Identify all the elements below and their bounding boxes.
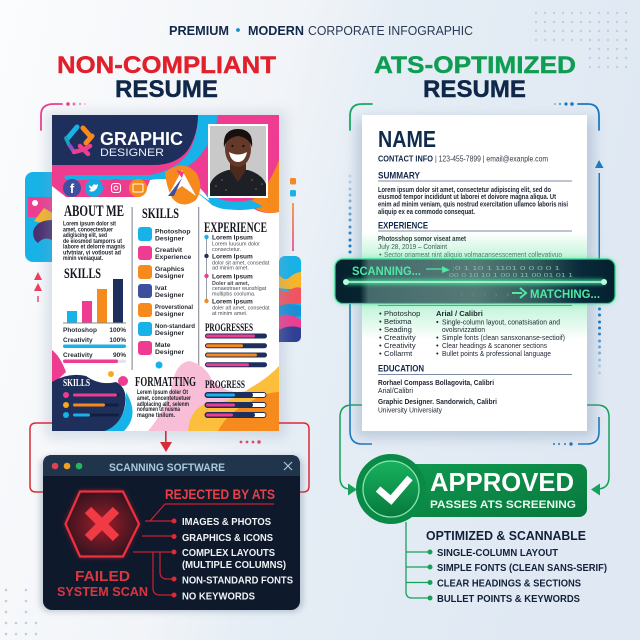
chart: skills bar chart: 100% bbox=[109, 327, 126, 334]
section: education: Rorhael Compass Bollagovita, Calibri bbox=[378, 378, 494, 387]
arrow: ats resume to approved, left bbox=[340, 405, 362, 496]
column: experience timeline: cenaestraer wuoshlgat bbox=[212, 286, 267, 292]
window title: SCANNING SOFTWARE bbox=[109, 462, 225, 474]
column: experience timeline: dolor sit amet, consedat bbox=[212, 260, 270, 266]
section: summary: eiusmod tempor incididunt ut laborei et doivore magna aliqua. Ut bbox=[378, 192, 556, 201]
column: skills list: Graphics bbox=[155, 266, 185, 273]
column: skills list: Non-standard bbox=[155, 323, 195, 330]
section: experience bbox=[378, 220, 572, 259]
approved label: APPROVED bbox=[430, 467, 574, 497]
name and contact: CONTACT INFO bbox=[378, 154, 434, 164]
logo: graphic designer bbox=[66, 127, 92, 154]
section: skills: Creativity bbox=[384, 341, 416, 350]
chart: skills bar chart: 90% bbox=[113, 352, 126, 359]
section: skills: Betixma bbox=[384, 317, 412, 326]
optimized and scannable checklist: SINGLE-COLUMN LAYOUT bbox=[437, 548, 559, 559]
top tagline: CORPORATE INFOGRAPHIC bbox=[308, 23, 473, 38]
progress panel bbox=[205, 379, 266, 418]
column: experience timeline: Lorem Ipsum bbox=[212, 234, 253, 242]
failed system scan label bbox=[57, 568, 148, 599]
section: education bbox=[378, 362, 572, 414]
glowing scan line bbox=[343, 279, 607, 285]
section: education: Arial/Calibri bbox=[378, 386, 413, 395]
rejection list: NON-STANDARD FONTS bbox=[182, 576, 293, 586]
column: experience timeline: Lorem Iuusum dolor bbox=[212, 242, 260, 248]
section: experience: • bbox=[379, 250, 382, 259]
chart: skills bar chart: Creativity bbox=[63, 337, 93, 344]
column: skills list: Designer bbox=[155, 273, 184, 280]
rejection connector lines bbox=[133, 504, 274, 595]
heading: non-compliant resume: NON-COMPLIANT bbox=[57, 52, 276, 79]
column: experience timeline: ad minim amet. bbox=[212, 266, 249, 272]
bottom colour blobs bbox=[52, 350, 279, 431]
mini skills panel: SKILLS bbox=[63, 377, 90, 389]
optimized and scannable checklist: SIMPLE FONTS (CLEAN SANS-SERIF) bbox=[437, 563, 607, 574]
section: experience: Photosshop somor viseat amet bbox=[378, 234, 466, 243]
column: experience timeline: consectetur. bbox=[212, 247, 241, 253]
section: education: Graphic Designer. Sandorwich, Calibri bbox=[378, 397, 497, 406]
column: experience timeline: multipbs cooluma. bbox=[212, 292, 255, 298]
section: skills: Simple fonts (clean sansxonanse-sectioif) bbox=[442, 333, 565, 342]
passes ats screening label: PASSES ATS SCREENING bbox=[430, 499, 576, 511]
column: about me: adiglscing elit, sed bbox=[63, 233, 107, 239]
scanning arrow and binary data bbox=[426, 266, 573, 279]
section: skills: • bbox=[436, 318, 439, 326]
section: skills: SKILLS bbox=[378, 294, 406, 305]
section: skills: • bbox=[436, 333, 439, 342]
column: about me: ABOUT ME bbox=[64, 203, 124, 220]
column: skills list: Designer bbox=[155, 292, 184, 299]
section: skills bbox=[378, 294, 572, 358]
section: experience: Sector oriameat nint aliquio volmacansesscement collevativuo bbox=[384, 250, 562, 259]
column: experience timeline: EXPERIENCE bbox=[204, 220, 267, 236]
column: skills list: Proverstional bbox=[155, 304, 193, 311]
column: experience timeline: at minim amet. bbox=[212, 311, 247, 317]
chart: skills bar chart: 100% bbox=[109, 337, 126, 344]
scanning arrow and binary data: 00 0 10 10 1 00 0 11 00 01 01 1 bbox=[449, 273, 573, 279]
column: about me: ufvtniar, vi votloust ad bbox=[63, 250, 121, 256]
section: summary: SUMMARY bbox=[378, 170, 421, 180]
chart: skills bar chart: Creativity bbox=[63, 352, 93, 359]
section: skills: • bbox=[436, 349, 439, 358]
column: about me: labore et delorre magnis bbox=[63, 244, 126, 250]
column: experience timeline: Lorem Ipsum bbox=[212, 274, 253, 280]
name and contact: | 123-455-7899 | email@exanple.com bbox=[435, 154, 548, 164]
heading: ats-optimized resume bbox=[374, 52, 576, 103]
arrow: left resume to scanner, centre bbox=[160, 431, 172, 452]
arrow: ats resume to approved, right bbox=[587, 405, 609, 496]
section: skills: • bbox=[379, 317, 382, 326]
chart: skills bar chart: Photoshop bbox=[63, 327, 97, 334]
checklist connector bbox=[406, 522, 432, 600]
rejection list: NO KEYWORDS bbox=[182, 592, 255, 602]
column: experience timeline: doler alt amet, consedat bbox=[212, 306, 270, 312]
chart: skills bar chart bbox=[63, 266, 126, 363]
section: summary bbox=[378, 170, 572, 216]
rejection list bbox=[172, 517, 293, 602]
column: skills list: SKILLS bbox=[142, 206, 179, 222]
panel: non-compliant graphic resume bbox=[46, 112, 286, 438]
top tagline bbox=[169, 23, 473, 38]
decorative side elements: left resume bbox=[25, 0, 301, 342]
progress bars panel bbox=[205, 322, 267, 367]
rejection list: IMAGES & PHOTOS bbox=[182, 517, 271, 528]
optimized and scannable checklist bbox=[406, 522, 607, 605]
social icons bbox=[63, 179, 147, 197]
section: summary: Lorem ipsum dolor sit amet, consectetur adipiscing elit, sed do bbox=[378, 185, 551, 194]
mini skills panel bbox=[63, 377, 119, 418]
section: skills: • bbox=[436, 341, 439, 350]
section: education: University Universiaty bbox=[378, 406, 442, 414]
section: skills: Photoshop bbox=[384, 309, 420, 318]
approved badge bbox=[356, 454, 587, 524]
matching label and arrow: MATCHING... bbox=[530, 287, 600, 301]
name and contact bbox=[378, 126, 548, 164]
column: experience timeline: Lorem Ipsum bbox=[212, 254, 253, 260]
section: education: EDUCATION bbox=[378, 362, 424, 374]
section: skills: • bbox=[379, 341, 382, 350]
column: experience timeline bbox=[204, 220, 270, 317]
heading: ats-optimized resume: ATS-OPTIMIZED bbox=[374, 52, 576, 79]
decorative side elements: right resume bbox=[348, 102, 604, 446]
section: experience: July 28, 2019 – Conlaint bbox=[378, 242, 448, 251]
formatting text block: amet, concentetuetuer bbox=[137, 396, 192, 402]
social icons: f bbox=[70, 181, 75, 196]
arrow: left resume to scanner, left bbox=[30, 423, 70, 498]
column: about me: minin veniaquat. bbox=[63, 256, 103, 262]
section: skills: Seading bbox=[384, 325, 412, 334]
progress bars panel: PROGRESSES bbox=[205, 322, 253, 334]
scanning arrow and binary data: ;0 1 10 1 1101 0 0 0 0 1 bbox=[452, 266, 560, 272]
section: skills: Creativity bbox=[384, 333, 416, 342]
scanning label: SCANNING... bbox=[352, 264, 421, 278]
formatting text block: adlplacing alit, selenm bbox=[137, 402, 189, 408]
icon: failed hexagon bbox=[65, 491, 139, 557]
column: skills list: Photoshop bbox=[155, 228, 190, 236]
resume header with colour blobs bbox=[52, 115, 279, 213]
rejection list: (MULTIPLE COLUMNS) bbox=[182, 560, 286, 571]
top tagline: PREMIUM bbox=[169, 23, 229, 38]
chart: skills bar chart: SKILLS bbox=[64, 266, 101, 282]
panel: scanning software window bbox=[40, 455, 303, 612]
column: skills list: Designer bbox=[155, 311, 184, 318]
section: summary: enim ad minim veniam, quis nostrud exercitation ullamco laboris nisi bbox=[378, 200, 568, 208]
top tagline: MODERN bbox=[248, 23, 304, 38]
resume title bbox=[100, 129, 183, 159]
section: skills: • bbox=[379, 325, 382, 334]
section: experience: EXPERIENCE bbox=[378, 220, 428, 230]
section: skills: Clear headings & scanoner sections bbox=[442, 341, 547, 350]
column: about me bbox=[63, 203, 126, 262]
portrait photo bbox=[208, 124, 268, 198]
icon: check circle bbox=[356, 454, 426, 524]
optimized and scannable checklist: BULLET POINTS & KEYWORDS bbox=[437, 594, 580, 605]
scanning bar bbox=[335, 259, 615, 304]
section: skills: Single-column layout, conatsisation and bbox=[442, 318, 560, 326]
failed system scan label: SYSTEM SCAN bbox=[57, 584, 148, 599]
progress panel: PROGRESS bbox=[205, 379, 245, 391]
rejected by ats label: REJECTED BY ATS bbox=[165, 486, 275, 502]
column: experience timeline: Lorem Ipsum bbox=[212, 298, 253, 306]
section: skills: Bullet points & professional language bbox=[442, 349, 551, 358]
formatting text block: FORMATTING bbox=[135, 375, 196, 390]
heading: non-compliant resume: RESUME bbox=[115, 76, 218, 103]
formatting text block: magne tinilum. bbox=[137, 413, 175, 419]
section: skills: • bbox=[379, 349, 382, 358]
column: experience timeline: Doler ait amet, bbox=[212, 281, 250, 287]
section: summary: aliquip ex ea commodo consequat. bbox=[378, 207, 475, 216]
column: skills list: Ivat bbox=[155, 285, 167, 292]
formatting text block: nonumen ut nusma bbox=[137, 407, 181, 413]
column: skills list: Designer bbox=[155, 330, 184, 337]
name and contact: NAME bbox=[378, 126, 436, 152]
column: skills list: Designer bbox=[155, 349, 184, 356]
section: skills: Collarmt bbox=[384, 349, 413, 358]
column: skills list: Experience bbox=[155, 254, 191, 261]
optimized and scannable checklist: CLEAR HEADINGS & SECTIONS bbox=[437, 578, 581, 590]
heading: non-compliant resume bbox=[57, 52, 276, 103]
column: skills list: Mate bbox=[155, 342, 171, 349]
matching label and arrow bbox=[460, 287, 600, 301]
formatting text block: Lerem Ipsum doler Ot bbox=[137, 390, 188, 396]
window controls bbox=[52, 462, 292, 470]
matching label and arrow: › › › › › bbox=[460, 289, 512, 299]
section: skills: • bbox=[379, 333, 382, 342]
column: skills list: Designer bbox=[155, 236, 184, 242]
formatting text block bbox=[135, 375, 196, 419]
rejection list: COMPLEX LAYOUTS bbox=[182, 548, 275, 559]
column: about me: Lorem ipsum dolor sit bbox=[63, 222, 116, 228]
column: skills list: Creativit bbox=[155, 247, 183, 254]
arrow: left resume to scanner, right bbox=[279, 423, 309, 498]
resume title: DESIGNER bbox=[100, 147, 164, 159]
section: skills: Arial / Calibri bbox=[436, 309, 483, 318]
section: skills: • bbox=[379, 309, 382, 318]
resume title: GRAPHIC bbox=[100, 129, 183, 149]
column: skills list bbox=[138, 206, 195, 356]
section: skills: ovolsrvizzation bbox=[442, 325, 485, 334]
rejection list: GRAPHICS & ICONS bbox=[182, 533, 273, 544]
column: about me: de eiosmod tamporrs ut bbox=[63, 239, 122, 245]
heading: ats-optimized resume: RESUME bbox=[423, 76, 526, 103]
panel: ats-optimized resume bbox=[356, 115, 594, 438]
optimized and scannable checklist: OPTIMIZED & SCANNABLE bbox=[426, 529, 586, 543]
column: about me: amet, conoectestuer bbox=[63, 228, 114, 234]
failed system scan label: FAILED bbox=[75, 568, 130, 585]
